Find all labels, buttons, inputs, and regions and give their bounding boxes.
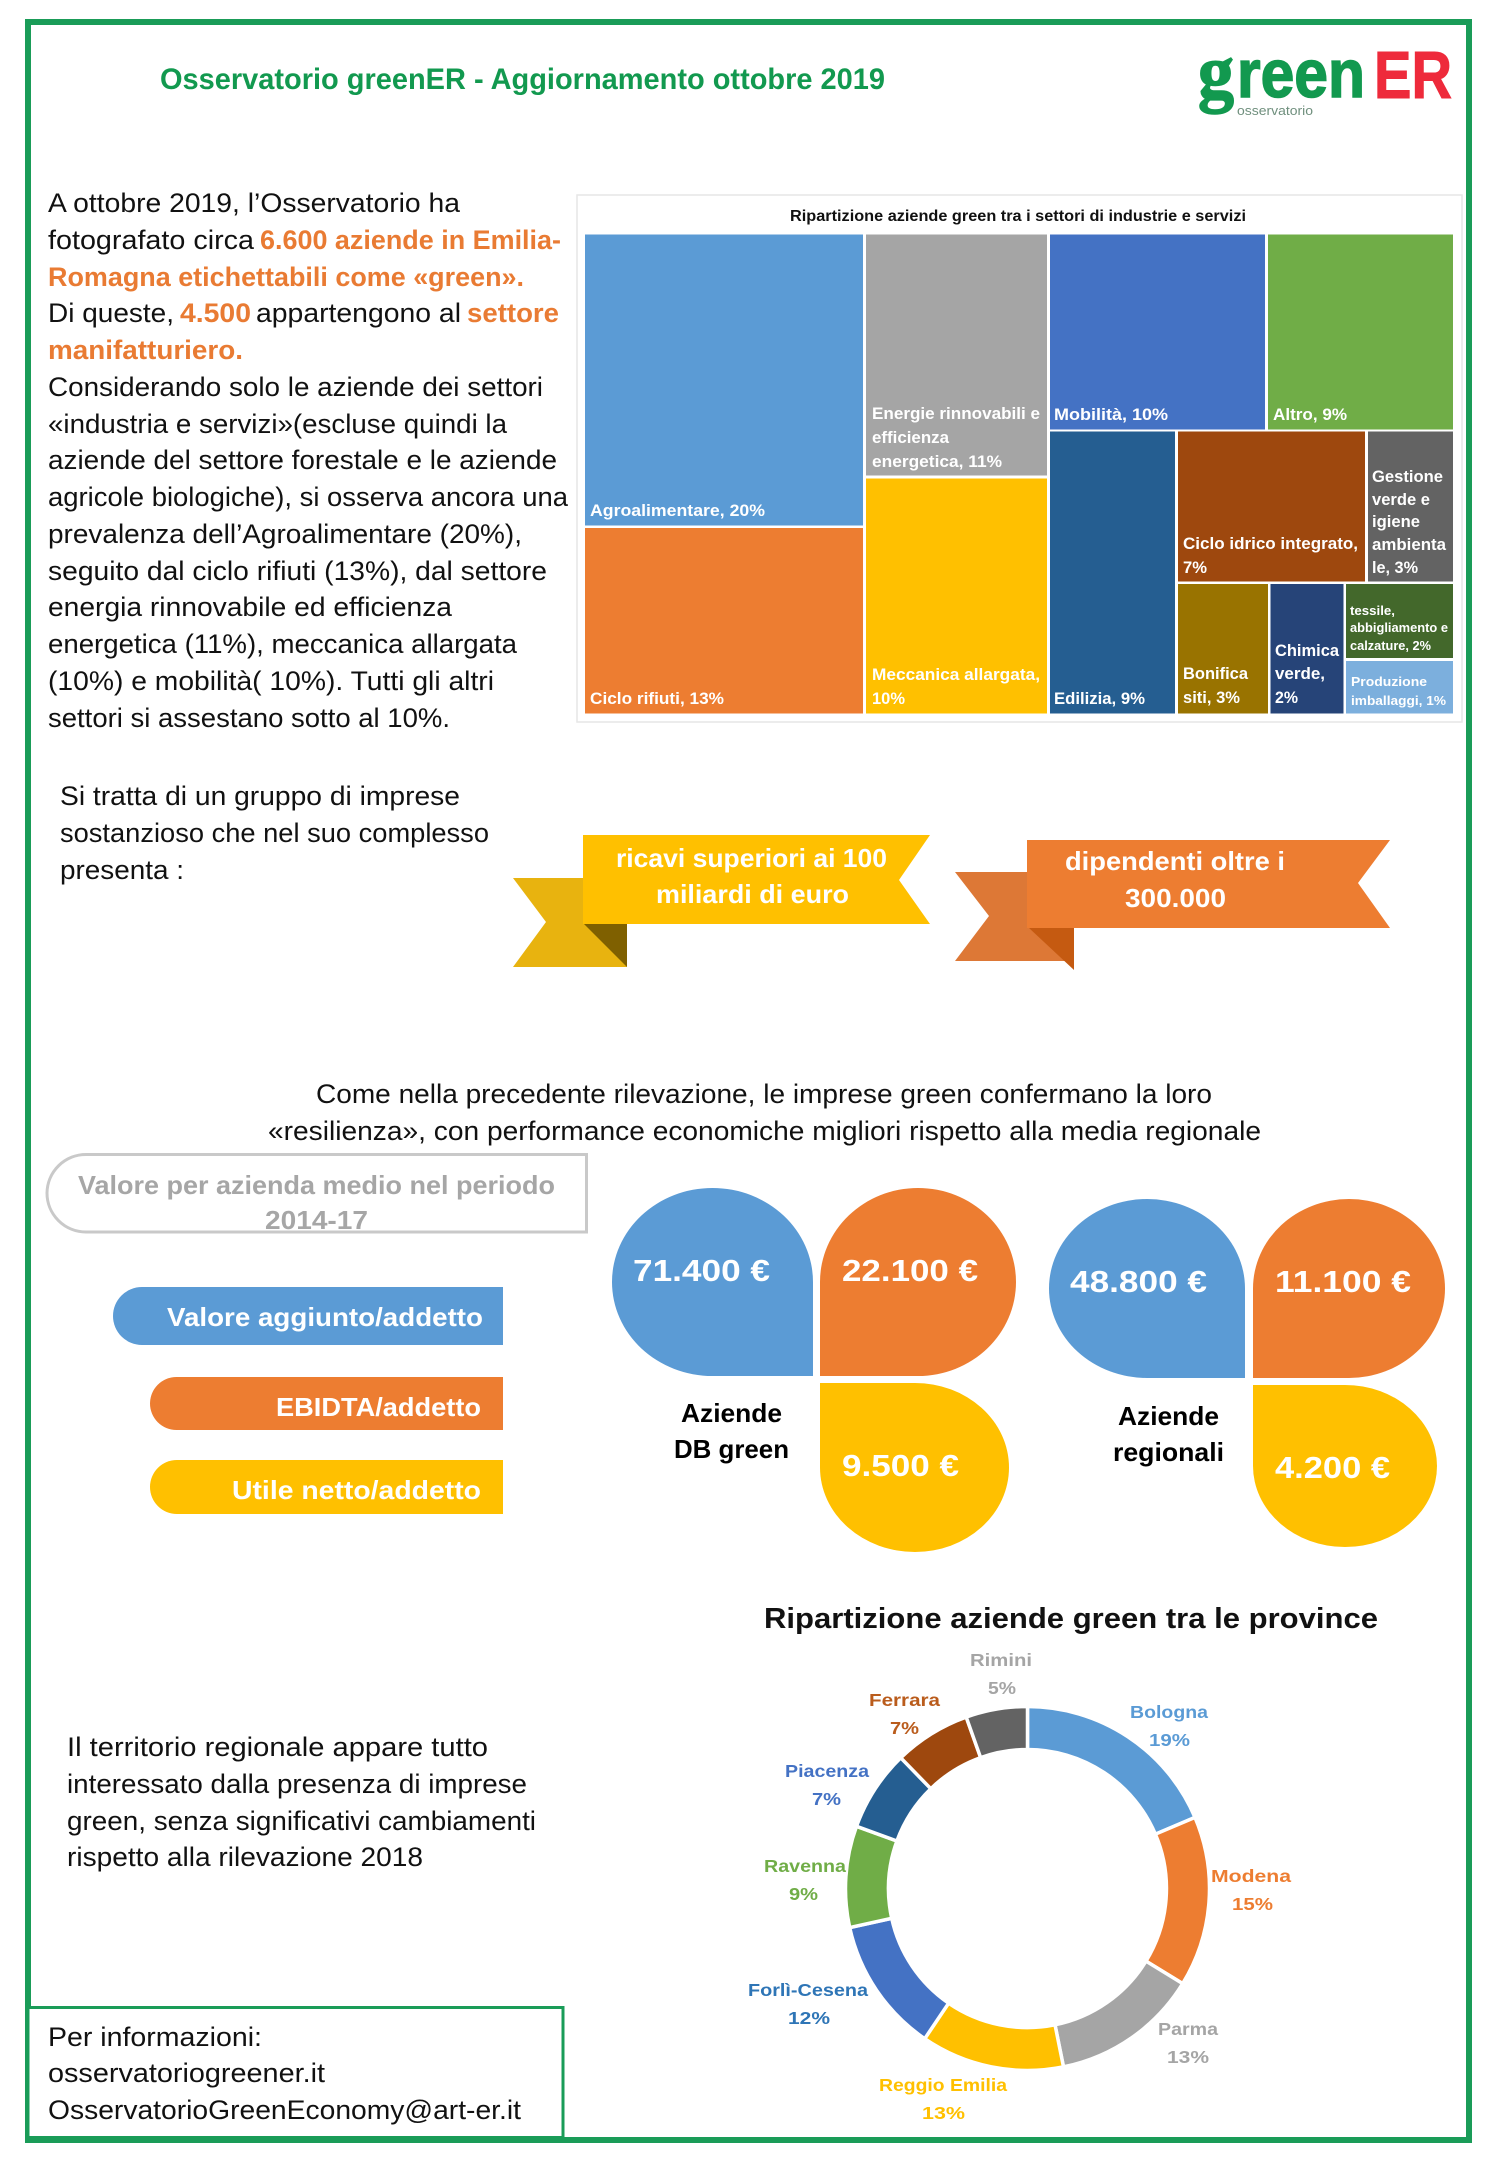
cell: Altro: Altro, 9% — [1273, 406, 1347, 424]
ribbon: dipendenti: dipendenti oltre i — [1065, 846, 1285, 876]
cell: Bonifica siti: Bonifica — [1183, 665, 1249, 683]
label: Aziende DB green — [674, 1398, 789, 1464]
petal: utile regionali: 4.200 € — [1275, 1450, 1390, 1485]
ribbon: dipendenti: 300.000 — [1125, 883, 1226, 913]
label: Bologna: Bologna — [1130, 1702, 1208, 1722]
intro text block: seguito dal ciclo rifiuti (13%), dal settore — [48, 556, 547, 586]
ribbon: ricavi: miliardi di euro — [656, 879, 849, 909]
logo: greenER osservatorio: g — [1198, 30, 1234, 114]
label: Piacenza — [785, 1761, 869, 1809]
label: Reggio Emilia — [879, 2075, 1007, 2123]
cell: Ciclo idrico integrato: Ciclo idrico integrato, — [1183, 535, 1358, 553]
info box: osservatoriogreener.it — [48, 2058, 326, 2088]
text: gruppo di imprese: sostanzioso che nel suo complesso — [60, 818, 489, 848]
donut labels — [748, 1650, 1291, 2123]
label: Aziende DB green: Aziende — [681, 1398, 782, 1428]
cell: Gestione verde e igiene ambientale: verde e — [1372, 491, 1430, 509]
petals: Aziende DB green — [612, 1188, 1016, 1552]
cell: Gestione verde e igiene ambientale — [1368, 432, 1453, 582]
cell: Agroalimentare — [585, 234, 863, 526]
petal: valore aggiunto regionali: 48.800 € — [1070, 1264, 1207, 1299]
intro text block: prevalenza dell’Agroalimentare (20%), — [48, 519, 522, 549]
label: Ferrara — [869, 1690, 940, 1738]
info box: OsservatorioGreenEconomy@art-er.it — [48, 2095, 522, 2125]
legend heading box — [47, 1154, 586, 1235]
text: resilienza — [268, 1079, 1261, 1146]
petal: utile regionali — [1253, 1385, 1437, 1547]
petal: valore aggiunto regionali — [1049, 1199, 1245, 1378]
cell: Gestione verde e igiene ambientale: ambienta — [1372, 536, 1447, 554]
label: Parma: Parma — [1158, 2019, 1218, 2039]
label: Piacenza: Piacenza — [785, 1761, 869, 1781]
cell: Energie rinnovabili: Energie rinnovabili e — [872, 405, 1040, 423]
legend: utile netto: Utile netto/addetto — [232, 1475, 481, 1505]
label: Modena: 15% — [1232, 1894, 1274, 1914]
label: Aziende regionali — [1113, 1401, 1224, 1467]
legend heading box: 2014-17 — [265, 1205, 368, 1235]
title: Osservatorio greenER - Aggiornamento ottobre 2019 — [160, 63, 885, 96]
cell: Ciclo rifiuti: Ciclo rifiuti, 13% — [590, 690, 724, 708]
treemap title: Ripartizione aziende green tra i settori di industrie e servizi — [790, 208, 1246, 225]
cell: Edilizia: Edilizia, 9% — [1054, 690, 1145, 708]
text: territorio regionale: Il territorio regionale appare tutto — [67, 1732, 488, 1762]
petal: utile green: 9.500 € — [842, 1448, 959, 1483]
donut chart: provinces — [845, 1706, 1209, 2070]
cell: Mobilità — [1050, 234, 1265, 430]
text: gruppo di imprese: presenta : — [60, 855, 184, 885]
label: Forlì-Cesena — [748, 1980, 868, 2028]
text: territorio regionale: green, senza significativi cambiamenti — [67, 1806, 536, 1836]
label: Aziende DB green: DB green — [674, 1434, 789, 1464]
intro text block: Considerando solo le aziende dei settori — [48, 372, 543, 402]
intro text block: energia rinnovabile ed efficienza — [48, 592, 453, 622]
label: Reggio Emilia: 13% — [922, 2103, 966, 2123]
donut heading: Ripartizione aziende green tra le province — [764, 1603, 1378, 1635]
label: Rimini: 5% — [988, 1678, 1016, 1698]
label: Forlì-Cesena: Forlì-Cesena — [748, 1980, 868, 2000]
label: Ferrara: 7% — [890, 1718, 919, 1738]
intro text block: manifatturiero. — [48, 335, 243, 365]
intro text block: (10%) e mobilità( 10%). Tutti gli altri — [48, 666, 494, 696]
logo: greenER osservatorio: reen — [1237, 36, 1365, 112]
petal: EBIDTA green: 22.100 € — [842, 1253, 978, 1288]
intro text block: settori si assestano sotto al 10%. — [48, 703, 450, 733]
petal: EBIDTA regionali: 11.100 € — [1275, 1264, 1411, 1299]
cell: Mobilità: Mobilità, 10% — [1054, 406, 1168, 424]
text: territorio regionale — [67, 1732, 536, 1872]
label: Ravenna: 9% — [789, 1884, 818, 1904]
label: Ravenna — [764, 1856, 846, 1904]
petals: Aziende regionali — [1049, 1199, 1445, 1547]
cell: Ciclo idrico integrato — [1178, 432, 1365, 582]
petal: EBIDTA regionali — [1253, 1199, 1445, 1378]
cell: Gestione verde e igiene ambientale: igiene — [1372, 513, 1420, 531]
label: Parma — [1158, 2019, 1218, 2067]
cell: Energie rinnovabili: efficienza — [872, 429, 950, 447]
petal: valore aggiunto green — [612, 1188, 813, 1376]
cell: Chimica verde: 2% — [1275, 689, 1298, 707]
intro text block: appartengono al — [256, 298, 461, 328]
petal: EBIDTA green — [820, 1188, 1016, 1376]
cell: Chimica verde: verde, — [1275, 665, 1325, 683]
legend: EBIDTA: EBIDTA/addetto — [276, 1392, 481, 1422]
label: Ferrara: Ferrara — [869, 1690, 940, 1710]
cell: Bonifica siti: siti, 3% — [1183, 689, 1240, 707]
label: Rimini — [970, 1650, 1032, 1698]
cell: Chimica verde — [1270, 584, 1344, 714]
petal: valore aggiunto green: 71.400 € — [633, 1253, 770, 1288]
info box — [28, 2008, 563, 2138]
cell: Meccanica allargata: Meccanica allargata, — [872, 666, 1040, 684]
text: resilienza: «resilienza», con performance economiche migliori rispetto alla media regionale — [268, 1116, 1261, 1146]
label: Forlì-Cesena: 12% — [788, 2008, 831, 2028]
intro text block: «industria e servizi»(escluse quindi la — [48, 409, 508, 439]
text: territorio regionale: interessato dalla presenza di imprese — [67, 1769, 527, 1799]
label: Aziende regionali: regionali — [1113, 1437, 1224, 1467]
cell: tessile: calzature, 2% — [1350, 638, 1431, 653]
cell: Meccanica allargata: 10% — [872, 690, 905, 708]
info box: Per informazioni: — [48, 2022, 262, 2052]
intro text block: Di queste, — [48, 298, 174, 328]
logo: greenER osservatorio: osservatorio — [1237, 103, 1313, 118]
cell: tessile — [1346, 584, 1453, 658]
label: Modena: Modena — [1211, 1866, 1291, 1886]
panel: treemap of sectors — [577, 195, 1462, 722]
label: Modena — [1211, 1866, 1291, 1914]
ribbon: dipendenti — [955, 840, 1390, 970]
intro text block: aziende del settore forestale e le aziende — [48, 445, 557, 475]
text: gruppo di imprese — [60, 781, 489, 885]
cell: Produzione imballaggi: imballaggi, 1% — [1351, 693, 1446, 708]
intro text block — [48, 188, 569, 733]
intro text block: Romagna etichettabili come «green». — [48, 262, 524, 292]
text: gruppo di imprese: Si tratta di un gruppo di imprese — [60, 781, 460, 811]
cell: Bonifica siti — [1178, 584, 1268, 714]
text: resilienza: Come nella precedente rilevazione, le imprese green confermano la loro — [316, 1079, 1212, 1109]
cell: Energie rinnovabili — [866, 234, 1047, 476]
intro text block: A ottobre 2019, l’Osservatorio ha — [48, 188, 461, 218]
legend: valore aggiunto: Valore aggiunto/addetto — [167, 1302, 483, 1332]
cell: Produzione imballaggi — [1346, 661, 1453, 714]
legend: utile netto — [150, 1460, 503, 1514]
cell: Produzione imballaggi: Produzione — [1351, 674, 1427, 689]
cell: Agroalimentare: Agroalimentare, 20% — [590, 502, 765, 520]
label: Aziende regionali: Aziende — [1118, 1401, 1219, 1431]
cell: Ciclo idrico integrato: 7% — [1183, 559, 1207, 577]
cell: Edilizia — [1050, 432, 1175, 714]
label: Ravenna: Ravenna — [764, 1856, 846, 1876]
cell: Gestione verde e igiene ambientale: le, 3% — [1372, 559, 1418, 577]
intro text block: 4.500 — [180, 298, 251, 328]
label: Rimini: Rimini — [970, 1650, 1032, 1670]
intro text block: agricole biologiche), si osserva ancora una — [48, 482, 569, 512]
legend: EBIDTA — [150, 1377, 503, 1430]
label: Piacenza: 7% — [812, 1789, 841, 1809]
legend heading box: Valore per azienda medio nel periodo — [78, 1170, 555, 1200]
intro text block: energetica (11%), meccanica allargata — [48, 629, 518, 659]
cell: tessile: tessile, — [1350, 603, 1395, 618]
cell: Ciclo rifiuti — [585, 528, 863, 714]
text: territorio regionale: rispetto alla rilevazione 2018 — [67, 1842, 423, 1872]
logo: greenER osservatorio: ER — [1374, 38, 1452, 113]
petal: utile green — [820, 1383, 1009, 1552]
label: Reggio Emilia: Reggio Emilia — [879, 2075, 1007, 2095]
label: Parma: 13% — [1167, 2047, 1210, 2067]
cell: Chimica verde: Chimica — [1275, 642, 1340, 660]
intro text block: fotografato circa — [48, 225, 255, 255]
intro text block: settore — [467, 298, 559, 328]
cell: Energie rinnovabili: energetica, 11% — [872, 453, 1002, 471]
logo: greenER osservatorio — [1198, 30, 1452, 118]
legend: valore aggiunto — [113, 1287, 503, 1345]
cell: Gestione verde e igiene ambientale: Gestione — [1372, 468, 1443, 486]
cell: Altro — [1268, 234, 1453, 430]
intro text block: 6.600 aziende in Emilia- — [260, 225, 561, 255]
ribbon: ricavi: ricavi superiori ai 100 — [616, 843, 887, 873]
label: Bologna: 19% — [1149, 1730, 1191, 1750]
label: Bologna — [1130, 1702, 1208, 1750]
cell: Meccanica allargata — [866, 478, 1047, 714]
cell: tessile: abbigliamento e — [1350, 620, 1448, 635]
ribbon: ricavi — [513, 835, 930, 967]
